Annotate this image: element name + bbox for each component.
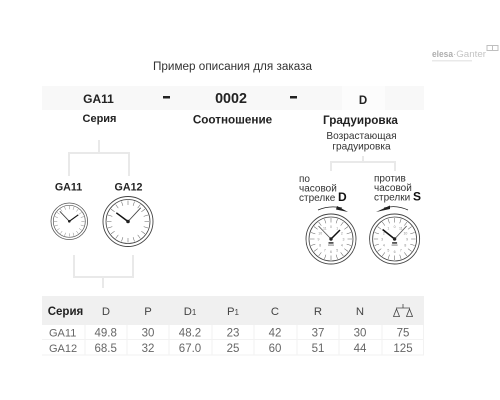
table row: GA12 <box>49 343 413 355</box>
text: ascending graduation <box>326 131 397 152</box>
logo: Elesa-Ganter <box>432 46 498 62</box>
clock: clockwise dial: 3 <box>343 238 345 242</box>
logo: Elesa-Ganter: ·Ganter <box>453 49 486 59</box>
table row: GA11: 37 <box>312 328 324 340</box>
table row: GA11: 75 <box>397 328 409 340</box>
clock: counter-clockwise dial: 11 <box>399 227 403 231</box>
clock: counter-clockwise dial: 2 <box>383 231 385 235</box>
text: counter-clockwise S: часовой <box>374 183 412 194</box>
order code band: GA11 <box>83 92 114 106</box>
table row: GA11: 49.8 <box>95 328 117 340</box>
text: clockwise D: стрелке D <box>299 190 347 204</box>
clock: clockwise dial <box>306 214 356 264</box>
label: GA11: GA11 <box>55 182 82 194</box>
heading: graduation: Градуировка <box>323 114 398 127</box>
logo: Elesa-Ganter: elesa <box>432 49 454 59</box>
clock: counter-clockwise dial: 10 <box>403 231 407 235</box>
table header labels: D <box>102 306 110 318</box>
order code band <box>42 86 424 110</box>
clock: clockwise dial: 9 <box>318 238 320 242</box>
table grid lines <box>42 325 424 355</box>
table row: GA12: 44 <box>354 343 367 355</box>
text: clockwise D: часовой <box>299 184 337 194</box>
clock: GA12 <box>103 196 153 246</box>
table header band <box>42 296 424 325</box>
bracket: models to table <box>74 255 133 288</box>
bracket: series to models <box>69 140 129 176</box>
clock: counter-clockwise dial <box>370 214 420 264</box>
text: clockwise D: по <box>299 174 310 185</box>
clock: clockwise dial: 0 <box>330 225 332 229</box>
clock: counter-clockwise dial: 8 <box>404 244 406 248</box>
clock: GA11 <box>51 203 88 240</box>
text: counter-clockwise S <box>374 174 421 204</box>
table row: GA12: 51 <box>312 343 324 355</box>
table header labels <box>48 306 364 318</box>
table header labels: P1 <box>227 306 240 318</box>
table row: GA12: GA12 <box>49 343 77 355</box>
text: clockwise D <box>299 174 347 204</box>
title: Пример описания для заказа <box>153 61 313 73</box>
table row: GA11: 23 <box>227 328 239 340</box>
table row: GA12: 32 <box>142 343 154 355</box>
clock: clockwise dial: 1 <box>336 227 338 231</box>
clock: clockwise dial: 11 <box>323 227 327 231</box>
table row: GA11: 30 <box>354 328 366 340</box>
order code band: 0002 <box>215 91 247 107</box>
table row: GA11: GA11 <box>49 328 76 340</box>
label: GA12: GA12 <box>115 182 143 194</box>
clock: counter-clockwise dial: 9 <box>406 238 408 242</box>
clock: clockwise dial: 2 <box>341 231 343 235</box>
icon: scales <box>394 304 412 316</box>
clock: clockwise dial: 7 <box>324 248 326 252</box>
table row: GA12: 25 <box>227 343 239 355</box>
clock: clockwise dial: 4 <box>341 244 343 248</box>
table row: GA11: 30 <box>142 328 154 340</box>
order code band: D <box>359 95 367 107</box>
clock: clockwise dial: 6 <box>330 250 332 254</box>
text: counter-clockwise S: стрелки S <box>374 190 421 204</box>
table header labels: C <box>271 306 279 318</box>
table row: GA12: 68.5 <box>95 343 117 355</box>
table header labels: P <box>144 306 152 318</box>
heading: ratio: Соотношение <box>193 113 273 126</box>
clock: clockwise dial: 8 <box>319 244 321 248</box>
arrow: counter-clockwise <box>376 206 408 212</box>
text: ascending graduation: Возрастающая <box>326 131 397 142</box>
bracket: graduation options <box>331 156 395 171</box>
table header labels: Серия <box>48 306 83 318</box>
clock: counter-clockwise dial: 1 <box>387 227 389 231</box>
table row: GA11: 48.2 <box>179 328 201 340</box>
table row: GA12: 125 <box>393 343 413 355</box>
text: ascending graduation: градуировка <box>332 142 391 152</box>
table: dimensions <box>42 296 424 355</box>
arrow: clockwise <box>318 206 348 212</box>
clock: counter-clockwise dial: 7 <box>400 248 402 252</box>
table row: GA12: 67.0 <box>179 343 201 355</box>
clock: counter-clockwise dial: 6 <box>394 250 396 254</box>
table header labels: N <box>356 306 364 318</box>
clock: clockwise dial: 5 <box>336 248 338 252</box>
text: counter-clockwise S: против <box>374 174 406 184</box>
clock: counter-clockwise dial: 3 <box>381 238 383 242</box>
table row: GA11 <box>49 328 409 340</box>
clock: counter-clockwise dial: 4 <box>383 244 385 248</box>
table header labels: R <box>314 306 322 318</box>
table header labels: D1 <box>184 306 197 318</box>
clock: counter-clockwise dial: 0 <box>394 225 396 229</box>
table row: GA11: 42 <box>269 328 281 340</box>
clock: clockwise dial: 10 <box>318 231 322 235</box>
clock: counter-clockwise dial: 5 <box>387 248 389 252</box>
heading: series: Серия <box>83 113 116 125</box>
table row: GA12: 60 <box>269 343 281 355</box>
